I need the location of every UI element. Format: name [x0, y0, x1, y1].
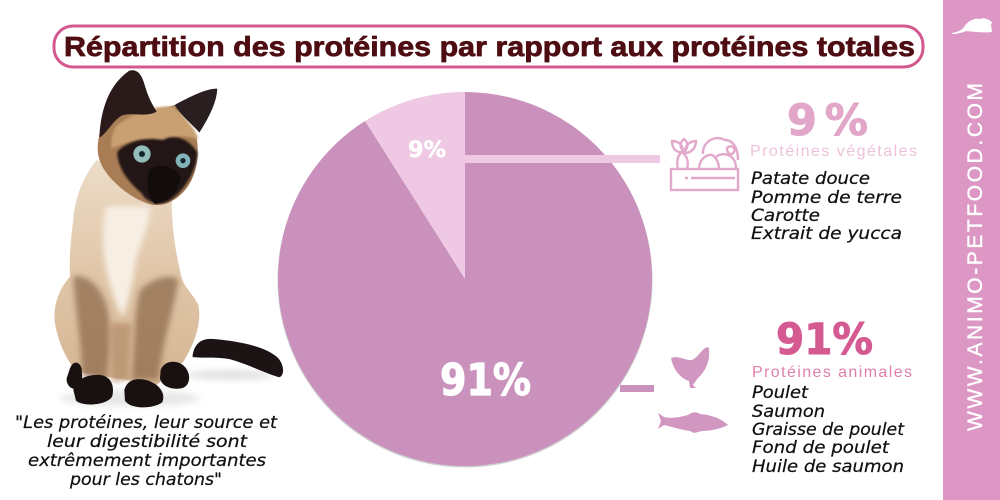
website url: WWW.ANIMO-PETFOOD.COM	[964, 83, 987, 431]
sidebar	[943, 0, 1000, 500]
quote: leur digestibilité sont	[47, 432, 248, 452]
head	[98, 105, 198, 205]
tail	[193, 339, 283, 377]
label: 9%: 9%	[408, 138, 446, 163]
quote: "Les protéines, leur source et	[15, 413, 278, 433]
quote	[15, 413, 278, 490]
title: Répartition des protéines par rapport aux protéines totales	[64, 31, 915, 62]
cat photo	[54, 70, 283, 407]
quote: extrêmement importantes	[28, 451, 266, 471]
face mask	[117, 137, 197, 203]
forehead fur	[111, 106, 198, 148]
list: vegetable sources: Pomme de terre	[751, 188, 902, 208]
connector: vegetable	[465, 155, 660, 163]
icon: chicken	[671, 347, 709, 388]
icon: vegetable crate	[671, 138, 738, 190]
chest	[103, 207, 150, 317]
list: animal sources: Fond de poulet	[752, 438, 890, 458]
title	[54, 26, 923, 67]
percent: 9 %: 9 %	[787, 96, 868, 146]
quote: pour les chatons"	[69, 470, 222, 490]
right ear	[175, 89, 217, 133]
body	[54, 160, 199, 385]
percent: 91%: 91%	[776, 315, 873, 365]
label: 91%: 91%	[440, 355, 531, 406]
slice: 91%	[278, 92, 652, 466]
list: vegetable sources: Extrait de yucca	[751, 224, 902, 244]
eyes	[133, 145, 151, 163]
icon: fish	[658, 412, 728, 433]
list: animal sources: Graisse de poulet	[752, 420, 905, 440]
list: vegetable sources: Carotte	[751, 206, 820, 226]
heading: protéines animales: Protéines animales	[752, 364, 912, 381]
slice: 9%	[365, 92, 465, 279]
animal proteins	[752, 315, 912, 477]
list: animal sources: Huile de saumon	[752, 457, 904, 477]
list: animal sources	[752, 383, 905, 477]
heading: protéines végétales: Protéines végétales	[750, 143, 917, 160]
connector: animal	[620, 385, 654, 392]
list: animal sources: Saumon	[752, 402, 825, 422]
paws	[67, 363, 83, 389]
front leg shading	[73, 276, 110, 380]
vegetable proteins	[750, 96, 917, 244]
list: vegetable sources: Patate douce	[751, 169, 870, 189]
list: animal sources: Poulet	[752, 383, 809, 403]
icon: mouse	[952, 18, 992, 34]
left ear	[99, 70, 157, 137]
pie chart	[278, 92, 652, 468]
list: vegetable sources	[751, 169, 902, 244]
